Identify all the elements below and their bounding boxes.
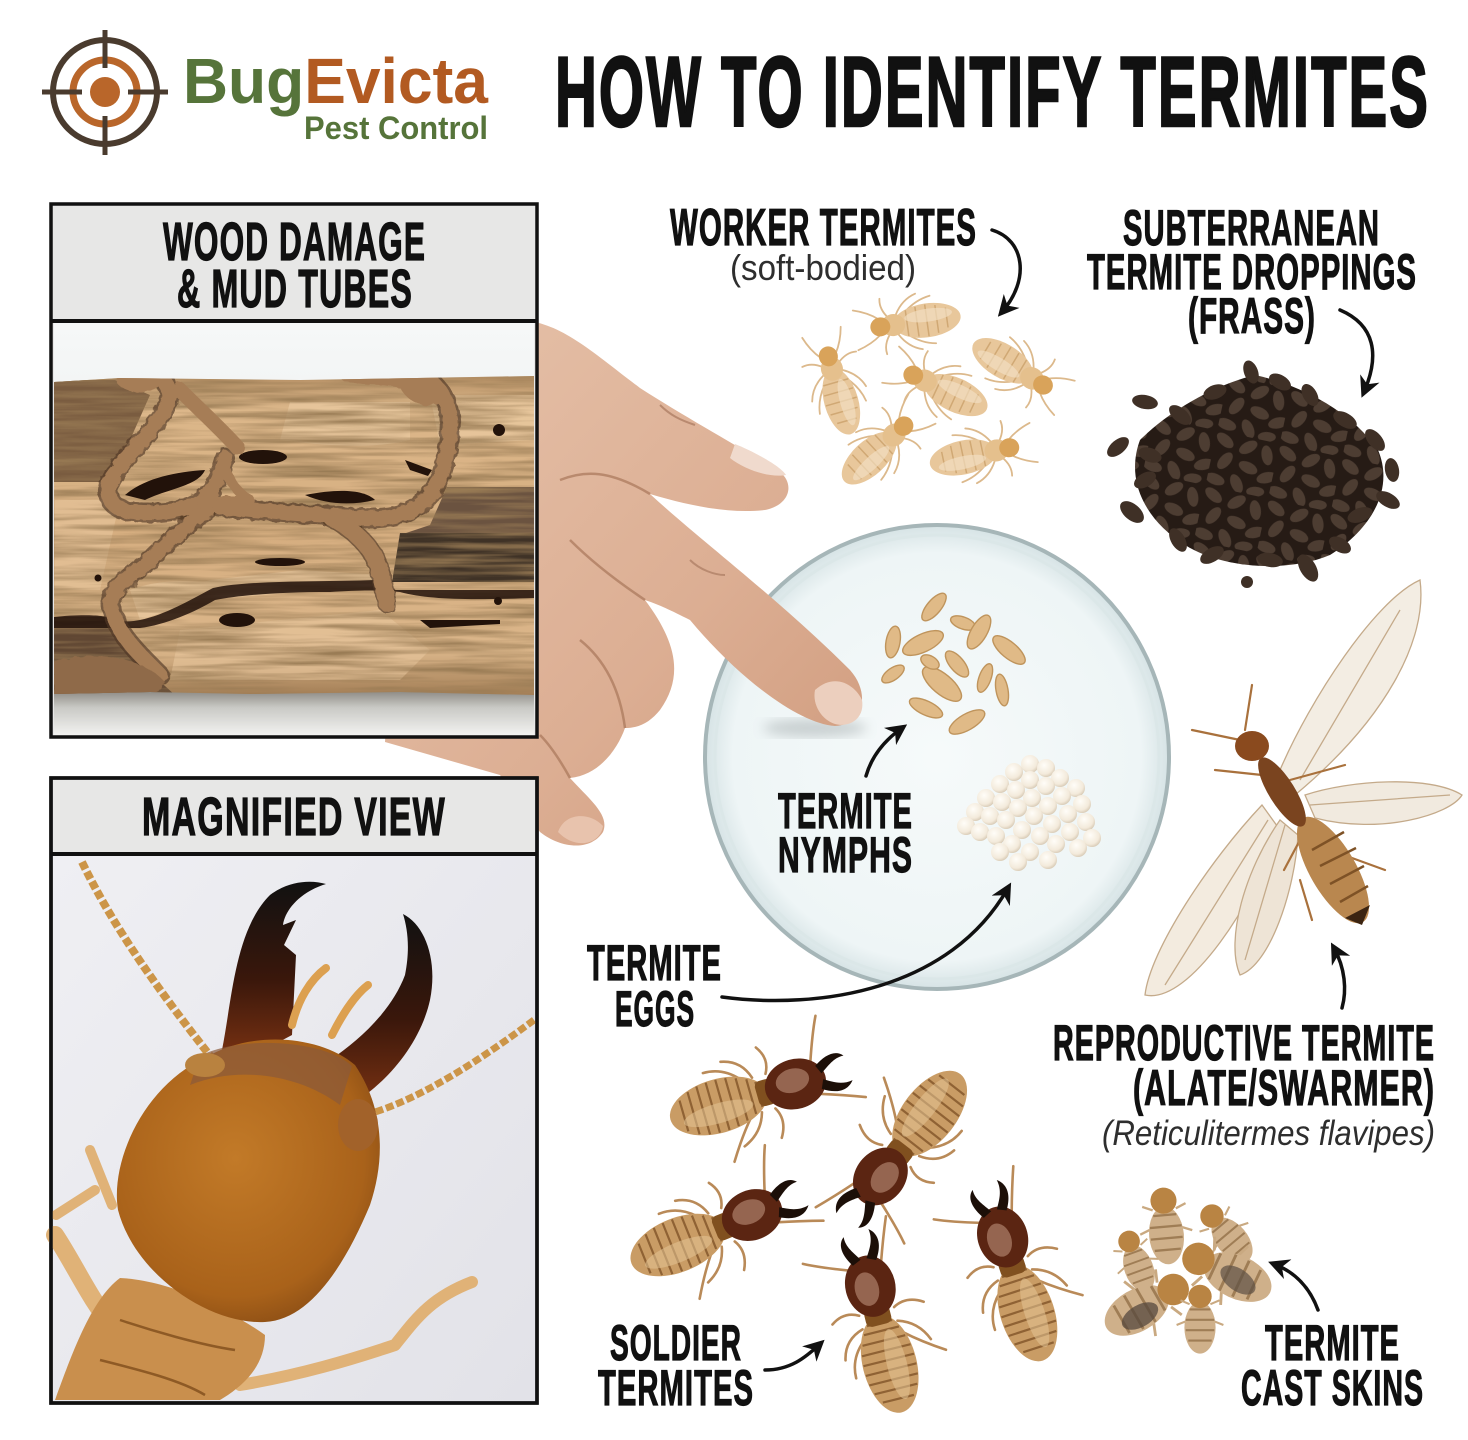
- holes and cracks: [54, 424, 534, 628]
- label: termite eggs: [587, 935, 722, 1037]
- label: termite eggs: TERMITE: [587, 935, 722, 991]
- panel heading: [53, 206, 535, 320]
- mandibles: [222, 882, 326, 1060]
- arrow: to alate: [1334, 948, 1345, 1008]
- logo tagline: Pest Control: [304, 110, 488, 146]
- termite nymphs: [879, 589, 1029, 739]
- mouthparts: [292, 968, 368, 1035]
- arrow: to cast skins: [1274, 1264, 1318, 1310]
- head capsule: [117, 1040, 380, 1322]
- logo: BugEvicta Pest Control: [42, 30, 488, 155]
- photo: damaged wood log: [54, 323, 534, 735]
- panel frame: [51, 778, 537, 1403]
- panel frame: [51, 204, 537, 737]
- reproductive termite (alate): [1145, 580, 1462, 996]
- panel: wood damage and mud tubes: [51, 204, 537, 737]
- arrow: to frass: [1340, 310, 1373, 392]
- label: worker termites: [670, 199, 977, 288]
- label: subterranean termite droppings: [1087, 200, 1417, 344]
- panel heading: WOOD DAMAGE: [163, 212, 426, 272]
- antennae: [82, 862, 534, 1115]
- label: termite nymphs: [778, 783, 913, 883]
- icon: target crosshair: [42, 30, 168, 155]
- petri dish: [705, 525, 1169, 989]
- legs: [55, 1150, 472, 1385]
- label: worker termites: (soft-bodied): [730, 247, 916, 288]
- light wood patches: [130, 395, 534, 620]
- label: termite cast skins: [1241, 1315, 1424, 1416]
- label: termite eggs: EGGS: [615, 981, 695, 1037]
- frass pile: [1104, 358, 1403, 588]
- label: soldier termites: SOLDIER: [610, 1315, 742, 1371]
- label: worker termites: WORKER TERMITES: [670, 199, 977, 257]
- panel heading: MAGNIFIED VIEW: [142, 787, 446, 847]
- logo wordmark: BugEvicta: [183, 45, 488, 117]
- label: soldier termites: [598, 1315, 754, 1416]
- bark: [54, 380, 150, 482]
- arrow: to soldiers: [765, 1344, 820, 1370]
- hand pointing at dish: [385, 320, 867, 846]
- photo: soldier termite head: [55, 862, 534, 1400]
- label: termite nymphs: TERMITE: [778, 783, 913, 839]
- head: [1235, 731, 1269, 761]
- termite eggs: [957, 755, 1101, 871]
- label: reproductive termite: (Reticulitermes flavipes): [1102, 1114, 1435, 1153]
- legs and antennae: [1192, 685, 1385, 920]
- group: soldier termites: [609, 1009, 1098, 1427]
- mud tubes: [54, 357, 450, 700]
- dish contents: [879, 589, 1101, 871]
- panel heading: [53, 780, 535, 853]
- arrow: to worker termites: [992, 230, 1020, 312]
- panel: magnified view: [51, 778, 537, 1403]
- label: reproductive termite: [1053, 1015, 1435, 1153]
- label: soldier termites: TERMITES: [598, 1360, 754, 1416]
- arrow: to nymphs: [866, 728, 902, 776]
- panel heading: & MUD TUBES: [177, 259, 413, 319]
- arrow: to eggs: [722, 888, 1008, 1001]
- label: termite nymphs: NYMPHS: [778, 827, 913, 883]
- group: termite cast skins: [1091, 1185, 1284, 1355]
- label: subterranean termite droppings: (FRASS): [1188, 288, 1316, 344]
- wings: [1145, 580, 1462, 996]
- group: worker termites: [795, 288, 1079, 502]
- thorax: [55, 1278, 265, 1400]
- abdomen: [1283, 807, 1383, 933]
- thorax: [1250, 751, 1314, 833]
